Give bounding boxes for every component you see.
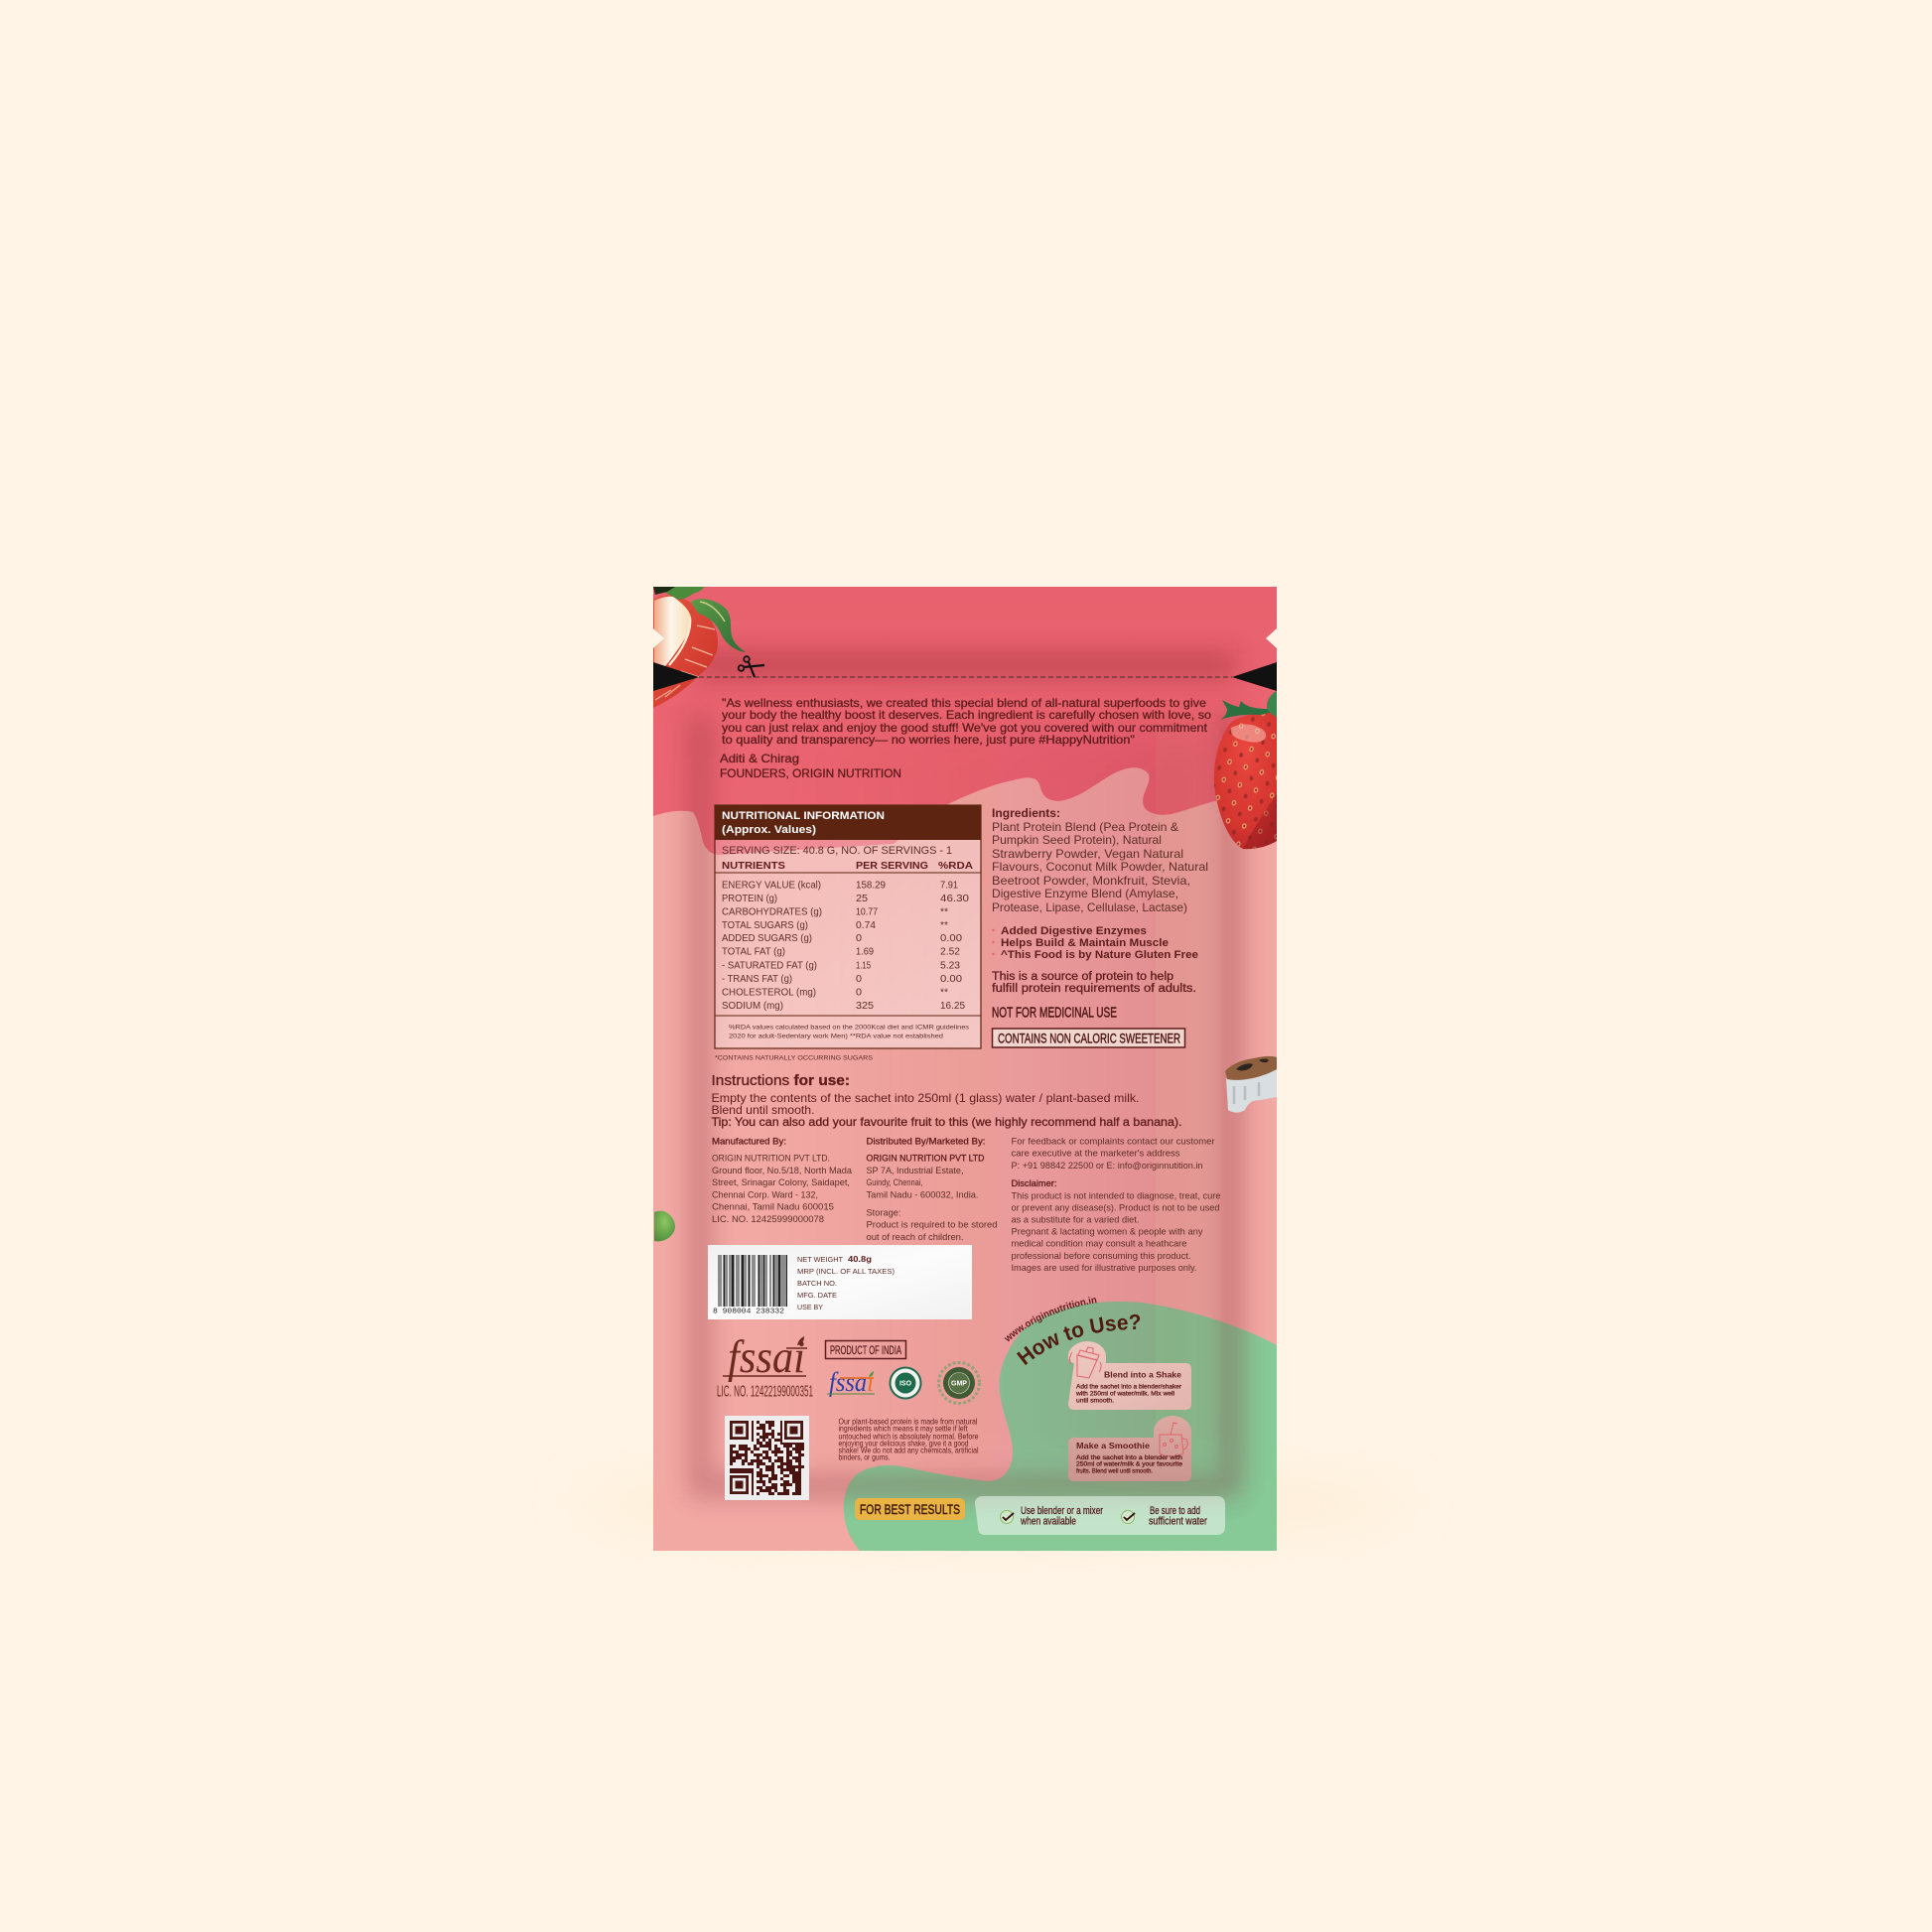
tear notch left <box>653 662 699 691</box>
founder quote: your body the healthy boost it deserves. Each ingredient is carefully chosen with love, so <box>722 708 1211 722</box>
icon: scissors <box>739 656 764 677</box>
tips bar: Be sure to add <box>1150 1505 1200 1517</box>
feedback and disclaimer: P: +91 98842 22500 or E: info@originnutition.in <box>1011 1161 1203 1172</box>
column headings <box>715 861 981 1016</box>
icon: smoothie jar <box>1160 1423 1187 1456</box>
founder quote: to quality and transparency— no worries here, just pure #HappyNutrition" <box>722 733 1135 747</box>
card: make a smoothie: Add the sachet into a blender with <box>1076 1454 1182 1461</box>
badge: GMP <box>939 1362 979 1404</box>
not for medicinal use: NOT FOR MEDICINAL USE <box>992 1005 1117 1021</box>
nutrient rows: ** <box>940 987 948 999</box>
feedback and disclaimer: as a substitute for a varied diet. <box>1011 1215 1140 1225</box>
feedback and disclaimer: Pregnant & lactating women & people with any <box>1011 1227 1203 1237</box>
nutrient rows: 1.69 <box>856 947 874 957</box>
card: blend into a shake: until smooth. <box>1076 1398 1114 1404</box>
instructions: Empty the contents of the sachet into 250ml (1 glass) water / plant-based milk. <box>711 1091 1140 1105</box>
nutrient rows: SODIUM (mg) <box>722 1001 783 1012</box>
nutrient rows: CHOLESTEROL (mg) <box>722 987 816 999</box>
nutrient rows: - TRANS FAT (g) <box>722 974 792 985</box>
instructions: Blend until smooth. <box>711 1103 814 1117</box>
card: blend into a shake <box>1068 1341 1191 1410</box>
feedback and disclaimer: care executive at the marketer's address <box>1011 1148 1180 1160</box>
tips bar: sufficient water <box>1149 1515 1207 1527</box>
instructions: Instructions for use: <box>711 1073 850 1089</box>
table footnote: %RDA values calculated based on the 2000Kcal diet and ICMR guidelines <box>729 1025 970 1031</box>
distributor and storage: Distributed By/Marketed By: <box>866 1136 985 1148</box>
card: blend into a shake: Add the sachet into a blender/shaker <box>1076 1384 1182 1390</box>
ground glow under pouch <box>576 1476 1410 1532</box>
icon: check two <box>1122 1511 1135 1523</box>
nutrient rows: 16.25 <box>940 1001 965 1012</box>
distributor and storage: ORIGIN NUTRITION PVT LTD <box>866 1154 985 1164</box>
salmon wave body <box>653 767 1277 1551</box>
card: blend into a shake: Blend into a Shake <box>1104 1370 1181 1380</box>
tips bar <box>975 1496 1225 1535</box>
panel: pouch <box>653 587 1277 1551</box>
tear notch right <box>1232 662 1277 691</box>
sweetener notice <box>993 1029 1185 1047</box>
strawberry right <box>1214 691 1277 849</box>
manufacturer: Chennai, Tamil Nadu 600015 <box>712 1201 834 1213</box>
shading: tear band <box>695 653 1236 677</box>
feedback and disclaimer: or prevent any disease(s). Product is not to be used <box>1011 1203 1219 1213</box>
table header <box>715 805 981 840</box>
benefit bullets: Added Digestive Enzymes <box>1001 925 1147 937</box>
feedback and disclaimer: For feedback or complaints contact our customer <box>1011 1136 1215 1148</box>
qr code <box>725 1416 809 1500</box>
card: make a smoothie: Make a Smoothie <box>1076 1442 1151 1450</box>
green pea <box>654 1211 675 1241</box>
sugars footnote: *CONTAINS NATURALLY OCCURRING SUGARS <box>715 1054 874 1062</box>
column headings: %RDA <box>938 861 973 872</box>
ingredients: Strawberry Powder, Vegan Natural <box>992 847 1183 861</box>
logo: small fssai: fssai <box>829 1367 874 1397</box>
nutrient rows: CARBOHYDRATES (g) <box>722 907 822 917</box>
nutrient rows: 2.52 <box>940 947 960 957</box>
manufacturer: Ground floor, No.5/18, North Mada <box>712 1166 853 1176</box>
instructions <box>711 1073 1181 1129</box>
icon: check one <box>1001 1511 1014 1523</box>
shading: right crease <box>1228 725 1240 1479</box>
badge: ISO: ISO <box>899 1380 912 1388</box>
tips bar: Use blender or a mixer <box>1021 1505 1103 1517</box>
qr finder clearings <box>729 1420 805 1496</box>
website url on curve: www.originnutrition.in <box>1005 1297 1097 1342</box>
table header: (Approx. Values) <box>722 824 816 836</box>
ingredients: Beetroot Powder, Monkfruit, Stevia, <box>992 874 1190 888</box>
card: blend into a shake: with 250ml of water/milk. Mix well <box>1075 1390 1175 1398</box>
protein claim <box>992 971 1196 995</box>
for best results badge <box>855 1498 965 1520</box>
card: make a smoothie: fruits. Blend well until smooth. <box>1076 1467 1153 1475</box>
distributor and storage: Tamil Nadu - 600032, India. <box>866 1189 979 1201</box>
label fields: 40.8g <box>848 1254 872 1264</box>
barcode <box>713 1281 787 1316</box>
manufacturer: LIC. NO. 12425999000078 <box>712 1214 824 1225</box>
nutrient rows: 7.91 <box>940 880 958 892</box>
manufacturer: ORIGIN NUTRITION PVT LTD. <box>712 1154 830 1164</box>
feedback and disclaimer: professional before consuming this product. <box>1011 1251 1191 1262</box>
panel: nutrition table <box>715 805 981 1048</box>
founder quote: FOUNDERS, ORIGIN NUTRITION <box>720 766 901 780</box>
product of india badge: PRODUCT OF INDIA <box>830 1343 901 1357</box>
nutrient rows: 0.00 <box>940 974 962 985</box>
nutrient rows: 0 <box>856 987 862 999</box>
nutrient rows: TOTAL SUGARS (g) <box>722 920 808 931</box>
benefit bullets: ^This Food is by Nature Gluten Free <box>1001 949 1198 961</box>
product of india badge <box>826 1340 905 1358</box>
badge: GMP: GMP <box>951 1380 967 1388</box>
icon: shaker <box>1070 1347 1101 1378</box>
benefit bullets <box>992 925 1198 961</box>
barcode: 8 908004 238332 <box>713 1309 784 1316</box>
ingredients: Pumpkin Seed Protein), Natural <box>992 833 1162 847</box>
for best results badge: FOR BEST RESULTS <box>860 1501 960 1517</box>
ingredients: Protease, Lipase, Cellulase, Lactase) <box>992 900 1187 914</box>
label fields: MRP (INCL. OF ALL TAXES) <box>797 1267 896 1276</box>
nutrient rows: TOTAL FAT (g) <box>722 947 785 957</box>
founder quote: Aditi & Chirag <box>720 752 799 765</box>
nutrient rows: 0.00 <box>940 933 962 944</box>
pouch top colour <box>653 587 1277 855</box>
ingredients <box>992 808 1208 914</box>
label fields: BATCH NO. <box>797 1279 837 1288</box>
founder quote: you can just relax and enjoy the good stuff! We've got you covered with our commitment <box>722 721 1208 735</box>
manufacturer: Manufactured By: <box>712 1136 786 1148</box>
sweetener notice: CONTAINS NON CALORIC SWEETENER <box>998 1031 1180 1046</box>
feedback and disclaimer: medical condition may consult a heathcare <box>1011 1239 1187 1249</box>
nutrient rows: 10.77 <box>856 907 878 917</box>
manufacturer: Street, Srinagar Colony, Saidapet, <box>712 1177 850 1188</box>
nutrient rows: 0 <box>856 974 862 985</box>
table body <box>715 805 981 1048</box>
manufacturer: Chennai Corp. Ward - 132, <box>712 1189 818 1201</box>
protein settling note: untouched which is absolutely normal. Before <box>838 1432 979 1442</box>
qr finder patterns <box>731 1422 802 1493</box>
distributor and storage: Guindy, Chennai, <box>866 1177 923 1188</box>
protein settling note <box>838 1418 979 1461</box>
manufacturer <box>712 1136 853 1225</box>
nutrient rows: 25 <box>856 894 868 904</box>
nutrient rows: 158.29 <box>856 880 886 892</box>
feedback and disclaimer: Images are used for illustrative purposes only. <box>1011 1263 1197 1274</box>
badge: ISO <box>890 1366 921 1400</box>
strawberry slice top left <box>653 587 746 708</box>
qr finder centres <box>735 1426 798 1489</box>
protein settling note: Our plant-based protein is made from natural <box>838 1418 978 1426</box>
distributor and storage: out of reach of children. <box>866 1232 963 1243</box>
distributor and storage <box>866 1136 997 1243</box>
protein settling note: binders, or gums. <box>838 1453 890 1461</box>
distributor and storage: SP 7A, Industrial Estate, <box>866 1166 963 1176</box>
feedback and disclaimer: This product is not intended to diagnose, treat, cure <box>1011 1191 1221 1201</box>
protein claim: This is a source of protein to help <box>992 971 1173 983</box>
feedback and disclaimer: Disclaimer: <box>1011 1178 1056 1189</box>
nutrient rows: 0.74 <box>856 920 876 931</box>
label fields: USE BY <box>797 1303 823 1311</box>
chocolate piece <box>1225 1056 1277 1113</box>
nutrient rows: ** <box>940 920 948 931</box>
ingredients: Digestive Enzyme Blend (Amylase, <box>992 887 1178 900</box>
shading: middle tone <box>923 730 1232 1487</box>
tear line <box>699 677 1232 678</box>
label background <box>708 1245 972 1319</box>
nutrient rows: ENERGY VALUE (kcal) <box>722 880 821 892</box>
shading: pillow frame <box>700 715 1231 1486</box>
label fields: NET WEIGHT <box>797 1255 843 1264</box>
distributor and storage: Product is required to be stored <box>866 1219 997 1231</box>
founder quote <box>720 696 1211 780</box>
protein settling note: ingredients which means it may settle if left <box>838 1424 968 1434</box>
nutrient rows: 0 <box>856 933 862 944</box>
ingredients: Ingredients: <box>992 808 1060 820</box>
distributor and storage: Storage: <box>866 1207 901 1219</box>
table footnote <box>729 1025 970 1040</box>
nutrient rows: 5.23 <box>940 961 960 971</box>
card: make a smoothie: 250ml of water/milk & your favourite <box>1076 1461 1182 1467</box>
green blob <box>844 1302 1277 1551</box>
label fields: MFG. DATE <box>797 1291 837 1300</box>
protein settling note: shake! We do not add any chemicals, artificial <box>838 1446 979 1455</box>
ingredients: Flavours, Coconut Milk Powder, Natural <box>992 860 1208 874</box>
tips bar: when available <box>1020 1515 1076 1527</box>
nutrient rows: ** <box>940 907 948 917</box>
table header: NUTRITIONAL INFORMATION <box>722 810 885 822</box>
label fields <box>797 1254 896 1311</box>
nutrient rows: PROTEIN (g) <box>722 894 777 904</box>
founder quote: "As wellness enthusiasts, we created this special blend of all-natural superfoods to give <box>722 696 1206 710</box>
feedback and disclaimer <box>1011 1136 1221 1274</box>
nutrient rows: 46.30 <box>940 894 970 904</box>
nutrient rows: 325 <box>856 1001 874 1012</box>
ingredients: Plant Protein Blend (Pea Protein & <box>992 820 1178 834</box>
panel: barcode label <box>708 1245 972 1319</box>
nutrient rows: ADDED SUGARS (g) <box>722 933 812 944</box>
table footnote: 2020 for adult-Sedentary work Men) **RDA value not established <box>729 1033 943 1040</box>
licence number: LIC. NO. 12422199000351 <box>717 1384 813 1400</box>
how to use heading: How to Use? <box>1017 1314 1140 1365</box>
instructions: Tip: You can also add your favourite fruit to this (we highly recommend half a banana). <box>711 1115 1181 1129</box>
card: make a smoothie <box>1068 1416 1191 1481</box>
logo: fssai: fssai <box>728 1331 805 1383</box>
nutrient rows <box>722 880 970 1012</box>
protein settling note: enjoying your delicious shake, give it a good <box>838 1440 969 1448</box>
serving size: SERVING SIZE: 40.8 G, NO. OF SERVINGS - 1 <box>722 845 952 857</box>
nutrient rows: 1.15 <box>856 961 871 971</box>
protein claim: fulfill protein requirements of adults. <box>992 983 1196 995</box>
nutrient rows: - SATURATED FAT (g) <box>722 961 817 971</box>
benefit bullets: Helps Build & Maintain Muscle <box>1001 937 1169 949</box>
column headings: NUTRIENTS <box>722 861 785 872</box>
column headings: PER SERVING <box>856 861 928 872</box>
